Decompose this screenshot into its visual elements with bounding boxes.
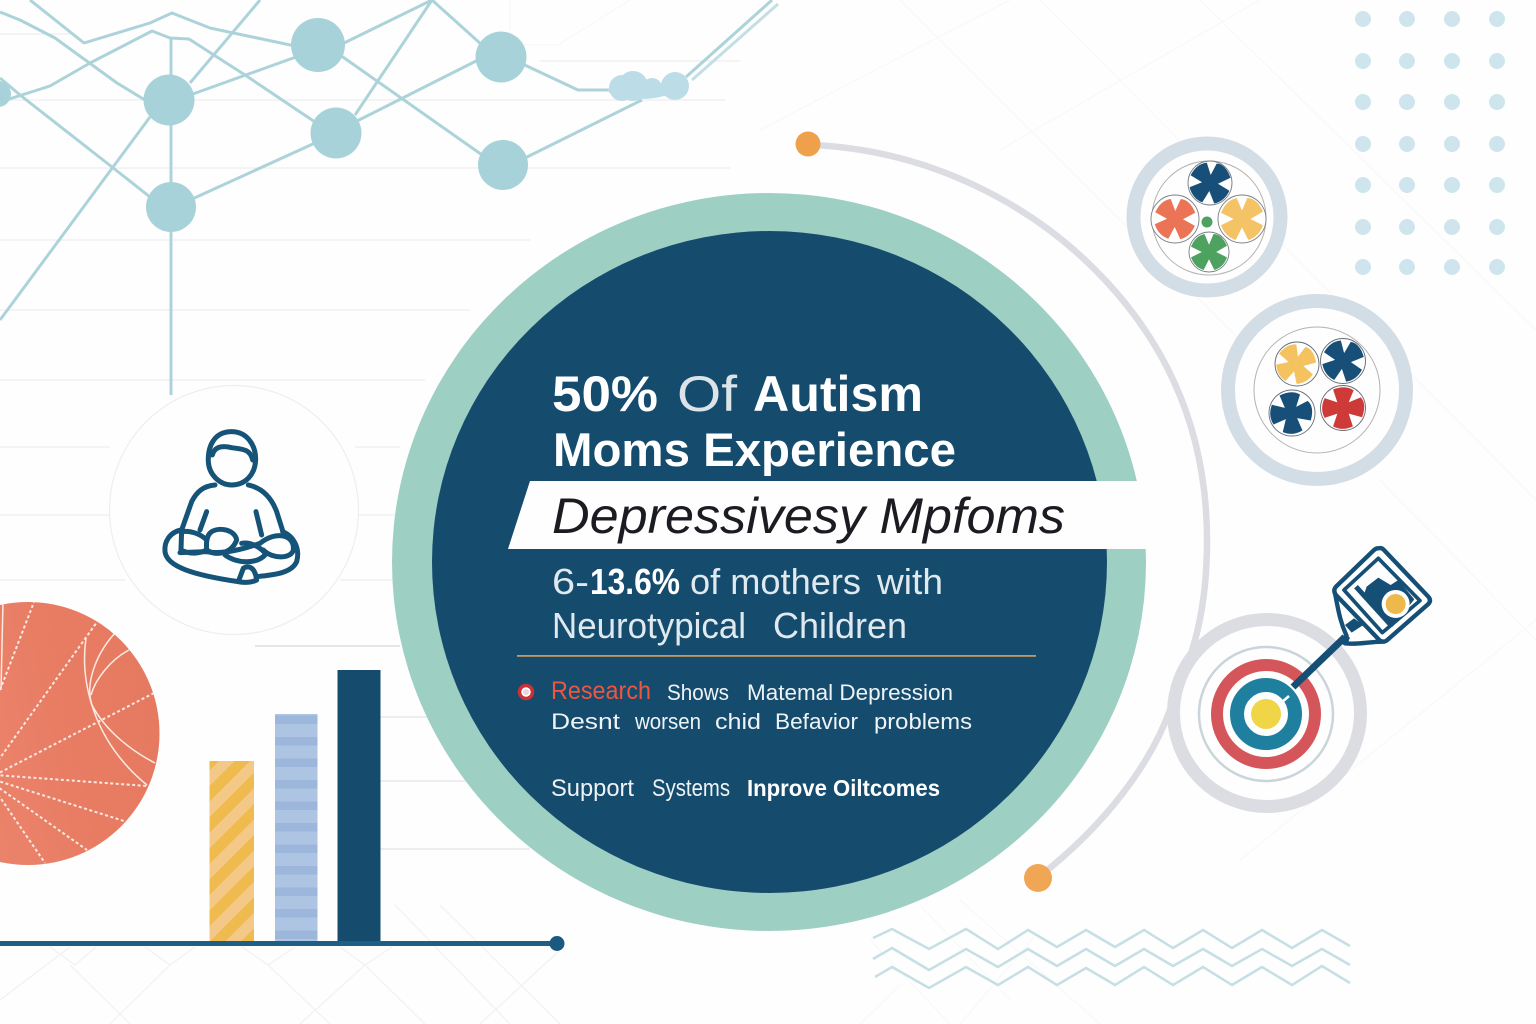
support text: Inprove Oiltcomes: [747, 775, 940, 801]
heading: Autism: [753, 366, 923, 422]
teal ring: [392, 193, 1146, 931]
heading: 50%: [552, 366, 658, 422]
heading: Moms Experience: [553, 423, 956, 476]
bar: yellow: [210, 761, 254, 941]
icon: mother holding child: [110, 386, 358, 634]
research text: [551, 677, 972, 734]
bar chart: [0, 670, 564, 951]
research text: chid: [715, 709, 761, 734]
curved connector arc with orange dots: [796, 132, 1207, 892]
dart flag: [1334, 548, 1430, 645]
statistic text: Neurotypical: [552, 605, 746, 646]
dot grid: [1355, 11, 1505, 275]
research text: Research: [551, 677, 651, 705]
bar: blue: [275, 714, 318, 941]
zigzag decoration: [873, 929, 1350, 988]
bullet icon: [520, 686, 532, 698]
support text: Systems: [652, 775, 730, 802]
statistic text: [552, 561, 943, 646]
research text: Desnt: [551, 709, 620, 734]
petri dish top: [1134, 144, 1280, 290]
research text: problems: [874, 709, 972, 734]
navy disc: [432, 231, 1107, 893]
support text: Support: [551, 775, 634, 802]
network nodes: [0, 18, 528, 232]
statistic text: 13.6%: [590, 561, 680, 602]
white banner: [508, 481, 1155, 549]
dart shaft: [1293, 637, 1345, 687]
statistic text: of mothers: [690, 561, 861, 602]
research text: Shows: [667, 680, 729, 705]
research text: Matemal Depression: [747, 680, 953, 705]
banner text: Depressivesy Mpfoms: [552, 488, 1065, 544]
support text: [551, 775, 940, 802]
petri dish bottom: [1228, 301, 1406, 479]
axis: [0, 936, 564, 951]
research text: Befavior: [775, 709, 858, 734]
research text: worsen: [634, 709, 701, 734]
heading: [552, 366, 956, 476]
icon: target with dart: [1174, 548, 1430, 806]
statistic text: Children: [773, 605, 907, 646]
cloud: [608, 71, 689, 101]
bar: navy: [338, 670, 380, 941]
divider rule: [517, 655, 1036, 657]
network diagram: [0, 0, 778, 395]
heading: Of: [677, 366, 737, 422]
panel: central circle: [392, 193, 1155, 931]
statistic text: 6-: [552, 561, 589, 602]
orange sphere: [0, 602, 160, 865]
statistic text: with: [876, 561, 943, 602]
